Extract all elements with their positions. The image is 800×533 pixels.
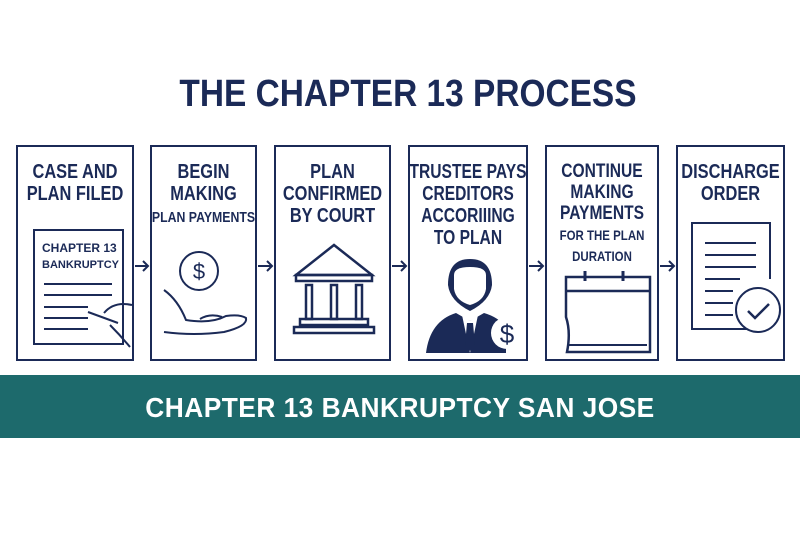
panel: trustee pays creditors: CREDITORS [422,183,514,205]
title: THE CHAPTER 13 PROCESS [179,73,637,115]
panel: trustee pays creditors: TO PLAN [434,227,502,249]
panel: continue making payments: CONTINUE [561,161,643,182]
arrow [660,260,676,272]
panel: begin making plan payments: BEGIN [178,161,229,183]
panel: continue making payments: DURATION [572,248,632,264]
panel: trustee pays creditors: ACCORIIING [421,205,515,227]
panel: discharge order: ORDER [701,183,760,205]
panel: discharge order: DISCHARGE [681,161,780,183]
banner [0,375,800,438]
panel: continue making payments: FOR THE PLAN [560,227,644,243]
panel: trustee pays creditors [408,145,528,361]
icon: person with dollar [426,259,515,353]
panel: plan confirmed by court [274,145,391,361]
panel: case and plan filed: PLAN FILED [27,183,123,205]
panel: continue making payments: MAKING [570,182,634,203]
arrow [392,260,408,272]
icon: calendar [564,271,652,354]
panel: continue making payments [545,145,659,361]
panel: begin making plan payments: PLAN PAYMENTS [152,209,255,226]
arrow [529,260,544,272]
panel: case and plan filed: CASE AND [32,161,118,183]
panel: discharge order [676,145,785,361]
panel: plan confirmed by court: BY COURT [290,205,375,227]
panel: plan confirmed by court: PLAN [310,161,355,183]
arrow [135,260,150,272]
panel: continue making payments: PAYMENTS [560,203,644,224]
icon: hand with coin: $ [193,259,205,284]
arrow [258,260,274,272]
banner text: CHAPTER 13 BANKRUPTCY SAN JOSE [145,392,655,423]
icon: hand with coin [164,251,248,335]
icon: document with hand [33,229,132,348]
icon: courthouse [292,243,376,334]
icon: document with hand: BANKRUPTCY [42,259,120,271]
panel: begin making plan payments: MAKING [170,183,237,205]
panel: plan confirmed by court: CONFIRMED [283,183,382,205]
icon: document with check [691,222,781,333]
panel: trustee pays creditors: TRUSTEE PAYS [409,161,527,183]
panel: begin making plan payments [150,145,257,361]
icon: document with hand: CHAPTER 13 [42,241,117,255]
panel: case and plan filed [16,145,134,361]
icon: person with dollar: $ [500,319,515,349]
